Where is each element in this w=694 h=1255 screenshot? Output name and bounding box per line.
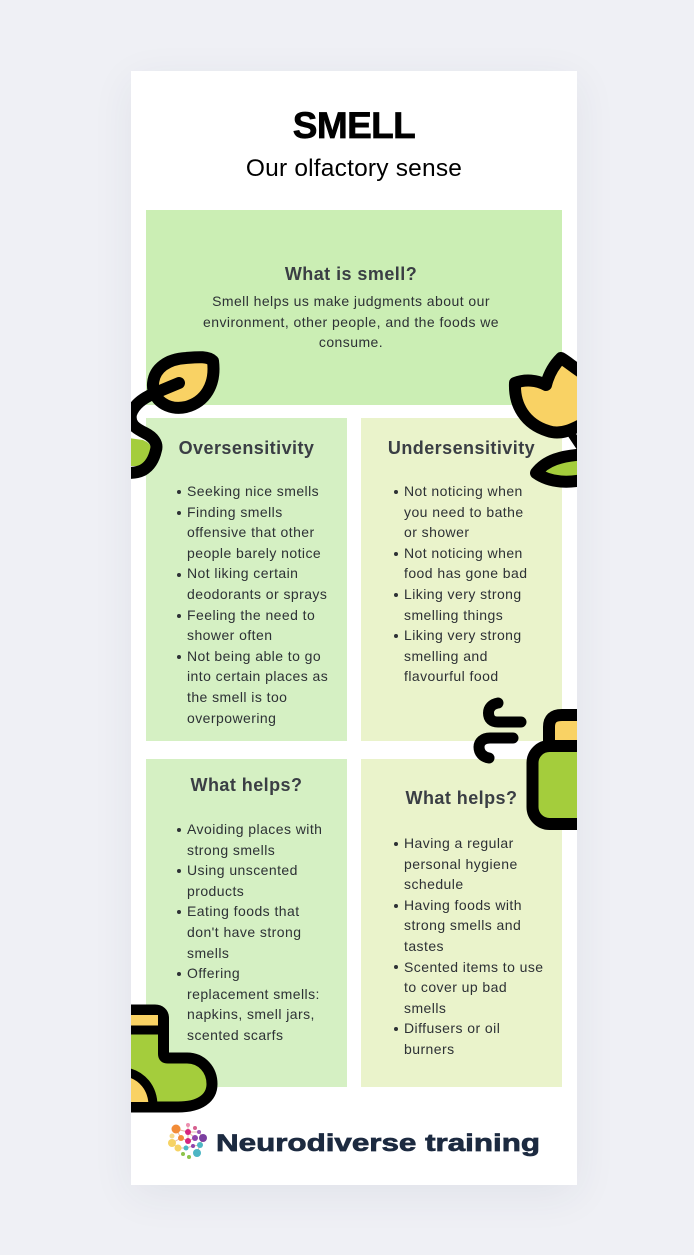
text: definition of smell: consume. [319, 334, 383, 350]
list: oversensitivity help: replacement smells: [187, 986, 320, 1002]
list: oversensitivity signs: people barely notice [187, 545, 321, 561]
list: oversensitivity signs: Seeking nice smells [187, 483, 319, 499]
list: undersensitivity signs: smelling and [404, 648, 488, 664]
list: undersensitivity signs: flavourful food [404, 668, 499, 684]
panel: oversensitivity [146, 418, 347, 741]
icon: leaf with stem [128, 357, 213, 473]
list: oversensitivity help [187, 821, 322, 1043]
list: oversensitivity signs: Finding smells [187, 504, 283, 520]
list: oversensitivity help: smells [187, 945, 229, 961]
list: undersensitivity help: Having foods with [404, 897, 522, 913]
heading: undersensitivity: Undersensitivity [388, 438, 535, 458]
list: undersensitivity help: tastes [404, 938, 444, 954]
list: oversensitivity help: Offering [187, 965, 240, 981]
list: undersensitivity signs: Not noticing when [404, 483, 523, 499]
title: SMELL [293, 105, 415, 146]
list: oversensitivity signs: deodorants or sprays [187, 586, 327, 602]
list: oversensitivity signs [187, 483, 328, 726]
list: oversensitivity signs: Not being able to go [187, 648, 321, 664]
icon: smell wisps [479, 703, 521, 758]
panel: undersensitivity [361, 418, 562, 741]
list: undersensitivity help: Having a regular [404, 835, 514, 851]
logo mark: brain dots [168, 1123, 207, 1159]
icon: sock [120, 1010, 212, 1107]
list: oversensitivity signs: into certain places as [187, 668, 328, 684]
logo wordmark: Neurodiverse training [216, 1130, 540, 1157]
list: undersensitivity signs: or shower [404, 524, 469, 540]
list: undersensitivity help: Diffusers or oil [404, 1020, 500, 1036]
panel: what is smell [146, 210, 562, 405]
list: oversensitivity help: products [187, 883, 244, 899]
text: definition of smell: environment, other people, and the foods we [203, 314, 499, 330]
heading: oversensitivity: Oversensitivity [179, 438, 314, 458]
list: oversensitivity help: strong smells [187, 842, 275, 858]
list: oversensitivity signs: Not liking certain [187, 565, 298, 581]
list: undersensitivity signs: smelling things [404, 607, 503, 623]
list: undersensitivity signs: you need to bathe [404, 504, 524, 520]
list: oversensitivity help: Eating foods that [187, 903, 300, 919]
list: oversensitivity help: scented scarfs [187, 1027, 283, 1043]
list: oversensitivity signs: overpowering [187, 710, 276, 726]
list: undersensitivity signs: Liking very strong [404, 627, 522, 643]
list: oversensitivity help: napkins, smell jars, [187, 1006, 315, 1022]
heading: what helps right: What helps? [406, 788, 517, 808]
text: definition of smell: Smell helps us make judgments about our [212, 293, 490, 309]
list: undersensitivity signs [404, 483, 527, 684]
text: definition of smell [203, 293, 499, 350]
panel: what helps undersensitivity [361, 759, 562, 1087]
list: oversensitivity help: Using unscented [187, 862, 298, 878]
list: oversensitivity help: Avoiding places with [187, 821, 322, 837]
card background [131, 71, 577, 1185]
list: oversensitivity signs: the smell is too [187, 689, 287, 705]
list: oversensitivity signs: offensive that other [187, 524, 315, 540]
logo: Neurodiverse training [168, 1123, 540, 1159]
list: undersensitivity signs: Liking very strong [404, 586, 522, 602]
list: undersensitivity help: to cover up bad [404, 979, 507, 995]
subtitle: Our olfactory sense [246, 154, 462, 182]
heading: what is smell: What is smell? [285, 264, 417, 284]
heading: what helps left: What helps? [191, 775, 302, 795]
list: oversensitivity signs: Feeling the need to [187, 607, 315, 623]
list: undersensitivity help: schedule [404, 876, 464, 892]
list: oversensitivity signs: shower often [187, 627, 272, 643]
icon: tulip flower [515, 358, 590, 482]
list: undersensitivity help: strong smells and [404, 917, 521, 933]
list: undersensitivity help: burners [404, 1041, 455, 1057]
list: undersensitivity signs: Not noticing when [404, 545, 523, 561]
list: undersensitivity help: Scented items to use [404, 959, 544, 975]
panel: what helps oversensitivity [146, 759, 347, 1087]
icon: perfume bottle [526, 709, 577, 830]
list: undersensitivity help: smells [404, 1000, 446, 1016]
list: undersensitivity signs: food has gone bad [404, 565, 527, 581]
list: undersensitivity help [404, 835, 544, 1057]
list: undersensitivity help: personal hygiene [404, 856, 518, 872]
list: oversensitivity help: don't have strong [187, 924, 301, 940]
